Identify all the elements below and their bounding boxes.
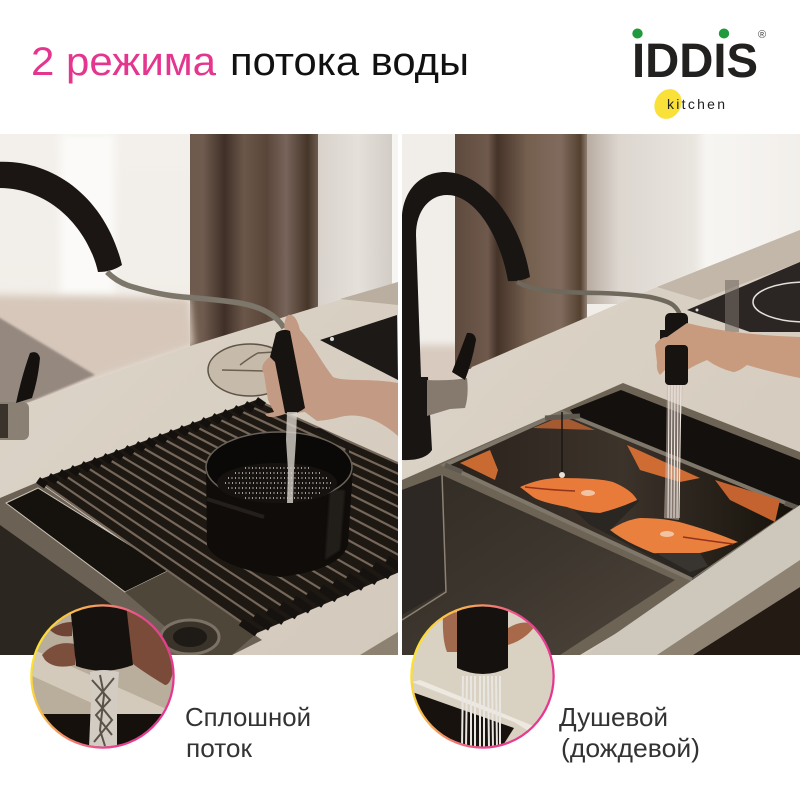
counter disc — [207, 343, 272, 397]
detail circle: solid stream — [30, 604, 176, 750]
logo: IDDIS kitchen: IDDIS — [632, 35, 758, 88]
drying rack — [36, 397, 398, 636]
panel: rain stream photo — [402, 134, 800, 655]
large basin — [402, 475, 675, 655]
title: 2 режима — [31, 40, 217, 84]
spray hose — [517, 282, 680, 315]
logo: IDDIS kitchen: kitchen — [667, 96, 725, 112]
detail circle: rain stream — [410, 604, 556, 750]
label: rain stream: (дождевой) — [561, 733, 700, 763]
hand — [262, 315, 398, 436]
spray nozzle — [70, 604, 133, 671]
label: solid stream: поток — [186, 733, 253, 763]
label: solid stream: Сплошной — [185, 702, 311, 732]
label: rain stream — [559, 702, 700, 763]
logo: IDDIS kitchen: ® — [758, 29, 766, 41]
label: rain stream: Душевой — [559, 702, 668, 732]
salmon steak — [520, 478, 637, 513]
small basin — [570, 390, 800, 506]
water stream — [664, 385, 683, 520]
spray head — [660, 313, 688, 385]
spray hose — [107, 272, 284, 328]
hand — [443, 612, 458, 652]
water — [89, 670, 119, 748]
spray head — [270, 330, 305, 414]
logo: IDDIS kitchen — [632, 28, 766, 124]
title: потока воды — [230, 40, 469, 84]
pot — [206, 430, 353, 577]
spray nozzle — [457, 604, 508, 674]
counter front — [614, 505, 800, 655]
salmon steak — [610, 518, 738, 554]
water stream — [286, 412, 297, 503]
faucet lever and body — [427, 333, 476, 416]
colander tray — [445, 412, 798, 581]
cooktop — [687, 262, 800, 332]
label: solid stream — [185, 702, 311, 763]
faucet — [402, 172, 530, 460]
counter top — [0, 282, 398, 605]
water — [462, 676, 500, 748]
sink rim and basins — [0, 482, 262, 655]
title — [31, 40, 469, 84]
spray head grip — [665, 345, 688, 385]
counter top — [402, 230, 800, 655]
sink rim — [402, 383, 800, 655]
hand — [125, 608, 175, 685]
hand — [655, 323, 800, 378]
faucet lever and body — [0, 352, 40, 440]
panel: solid stream photo — [0, 134, 398, 655]
faucet spout — [0, 162, 122, 272]
counter front edge — [360, 632, 398, 655]
cooktop — [320, 315, 398, 380]
